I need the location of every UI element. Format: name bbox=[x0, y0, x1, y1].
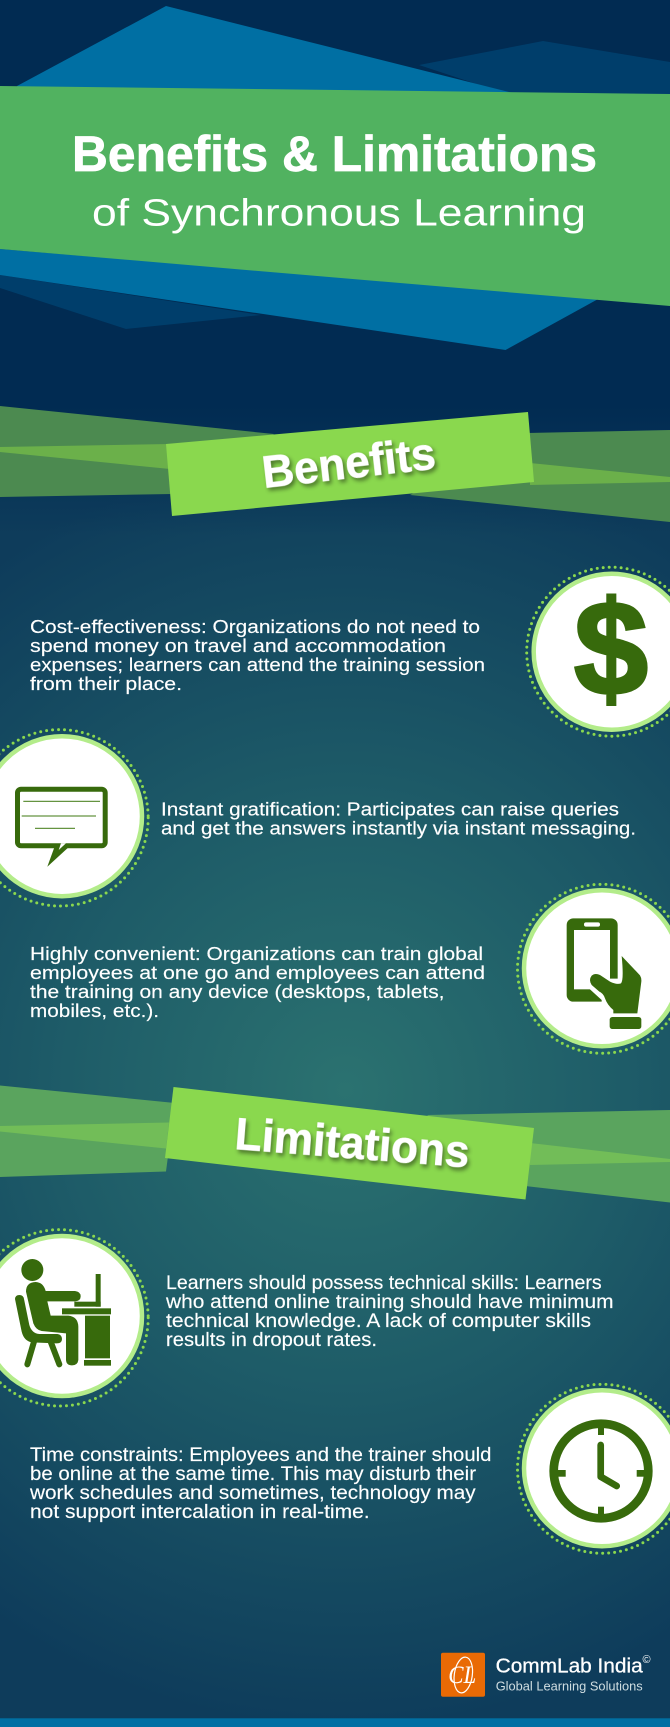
panel: highly convenient text: mobiles, etc.). bbox=[30, 1000, 159, 1021]
logo mark: CL bbox=[448, 1662, 476, 1689]
panel: technical skills text: who attend online training should have minimum bbox=[165, 1291, 614, 1313]
panel: time constraints text: work schedules and sometimes, technology may bbox=[29, 1482, 476, 1504]
panel: instant gratification text: and get the answers instantly via instant messaging. bbox=[161, 818, 636, 838]
panel: cost-effectiveness text bbox=[30, 616, 485, 694]
panel: time constraints text: not support intercalation in real-time. bbox=[30, 1501, 370, 1523]
icon: chat bubble bbox=[0, 730, 148, 906]
logo tagline: Global Learning Solutions bbox=[496, 1679, 643, 1694]
header decorative shapes bbox=[0, 6, 670, 350]
panel: highly convenient text: employees at one go and employees can attend bbox=[30, 962, 485, 983]
panel: technical skills text: results in dropout rates. bbox=[166, 1329, 377, 1351]
title line 2: of Synchronous Learning bbox=[92, 192, 586, 234]
bottom bar bbox=[0, 1718, 670, 1727]
panel: highly convenient text: Highly convenient: Organizations can train global bbox=[30, 943, 483, 964]
icon: dollar bbox=[527, 567, 670, 736]
panel: technical skills text: technical knowledge. A lack of computer skills bbox=[166, 1310, 591, 1332]
panel: technical skills text bbox=[165, 1272, 614, 1351]
logo name: CommLab India bbox=[496, 1656, 644, 1678]
panel: time constraints text: be online at the same time. This may disturb their bbox=[30, 1463, 477, 1485]
registered mark: © bbox=[642, 1654, 651, 1666]
panel: cost-effectiveness text: from their place. bbox=[30, 673, 182, 694]
limitations ribbon bbox=[0, 1086, 670, 1202]
limitations heading: Limitations bbox=[233, 1108, 471, 1177]
panel: time constraints text: Time constraints: Employees and the trainer should bbox=[30, 1444, 491, 1466]
panel: instant gratification text: Instant gratification: Participates can raise queries bbox=[161, 798, 619, 820]
panel: cost-effectiveness text: expenses; learners can attend the training session bbox=[30, 654, 485, 675]
panel: cost-effectiveness text: spend money on travel and accommodation bbox=[30, 635, 446, 656]
logo mark bbox=[441, 1653, 485, 1697]
logo bbox=[441, 1653, 651, 1697]
panel: time constraints text bbox=[29, 1444, 491, 1523]
title banner bbox=[0, 86, 670, 306]
icon: person at computer bbox=[0, 1230, 148, 1406]
benefits ribbon bbox=[0, 406, 670, 522]
icon: dollar: $ bbox=[574, 574, 648, 724]
panel: highly convenient text: the training on any device (desktops, tablets, bbox=[30, 981, 444, 1002]
icon: clock bbox=[518, 1384, 670, 1553]
benefits heading: Benefits bbox=[259, 428, 438, 498]
panel: highly convenient text bbox=[30, 943, 485, 1021]
panel: technical skills text: Learners should possess technical skills: Learners bbox=[166, 1272, 602, 1294]
title line 1: Benefits & Limitations bbox=[72, 126, 597, 182]
panel: instant gratification text bbox=[161, 798, 636, 838]
icon: phone in hand bbox=[518, 884, 670, 1053]
panel: cost-effectiveness text: Cost-effectiveness: Organizations do not need to bbox=[30, 616, 480, 637]
